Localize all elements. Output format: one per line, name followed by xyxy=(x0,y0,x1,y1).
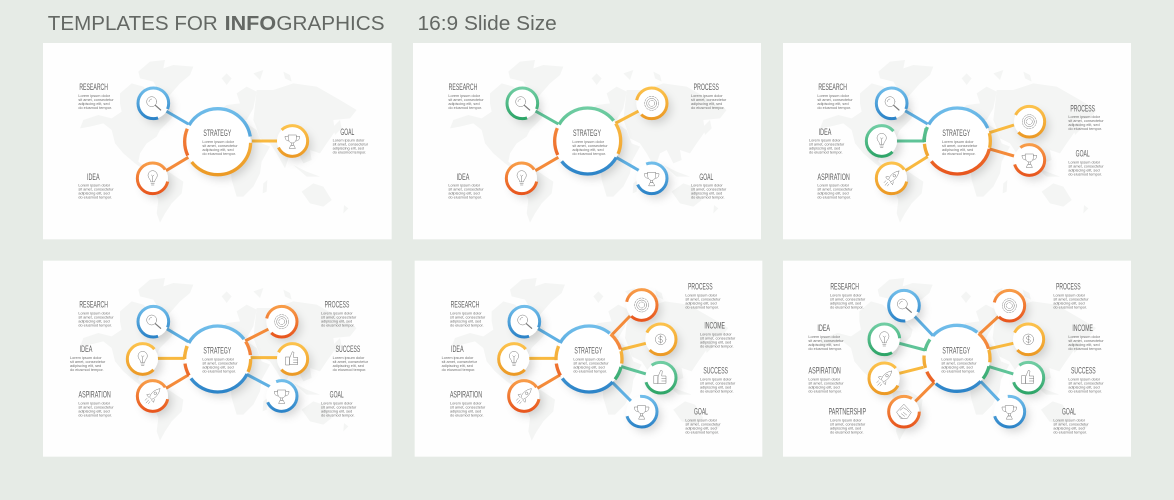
main circle: strategy xyxy=(556,326,622,392)
text: research: Lorem ipsum dolor xyxy=(78,94,111,98)
panel: seven nodes xyxy=(415,261,762,457)
text: idea: do eiusmod tempor. xyxy=(448,196,482,200)
text: aspiration: sit amet, consectetur xyxy=(808,382,844,386)
text: idea: sit amet, consectetur xyxy=(808,339,844,343)
text: idea: IDEA xyxy=(819,127,831,137)
text: income: adipiscing elit, sed xyxy=(700,341,731,345)
text: goal: sit amet, consectetur xyxy=(1068,164,1104,168)
text: process: adipiscing elit, sed xyxy=(685,302,717,306)
text: research: adipiscing elit, sed xyxy=(830,302,861,306)
text: research: Lorem ipsum dolor xyxy=(448,94,481,98)
text: research xyxy=(830,282,866,310)
text: strategy: sit amet, consectetur xyxy=(573,362,609,366)
text: goal: Lorem ipsum dolor xyxy=(691,184,723,188)
text: idea xyxy=(808,323,844,351)
text: process xyxy=(1068,103,1104,131)
text: idea: sit amet, consectetur xyxy=(448,188,484,192)
text: strategy: Lorem ipsum dolor xyxy=(202,140,235,144)
node: success xyxy=(250,344,308,374)
text: aspiration: sit amet, consectetur xyxy=(78,405,114,409)
text: aspiration: do eiusmod tempor. xyxy=(78,413,112,417)
text: research xyxy=(817,82,853,110)
text: process: sit amet, consectetur xyxy=(1068,119,1104,123)
text: strategy: STRATEGY xyxy=(203,128,231,138)
text: aspiration xyxy=(817,172,853,200)
text: success: do eiusmod tempor. xyxy=(333,368,366,372)
text: idea: IDEA xyxy=(87,172,100,182)
text: strategy: STRATEGY xyxy=(942,346,970,356)
text: strategy: do eiusmod tempor. xyxy=(202,152,236,156)
text: goal xyxy=(685,407,721,435)
text: process: Lorem ipsum dolor xyxy=(1068,115,1101,119)
text: income: INCOME xyxy=(704,321,725,331)
text: research: do eiusmod tempor. xyxy=(78,324,112,328)
node: process xyxy=(245,306,297,341)
node: goal xyxy=(252,126,308,156)
text: idea: adipiscing elit, sed xyxy=(809,147,840,151)
text: success: Lorem ipsum dolor xyxy=(1068,378,1101,382)
text: process: Lorem ipsum dolor xyxy=(321,312,353,316)
text: research: do eiusmod tempor. xyxy=(450,324,484,328)
text: strategy: sit amet, consectetur xyxy=(202,362,238,366)
panel: one goal, two inputs xyxy=(43,43,392,239)
text: research: RESEARCH xyxy=(449,82,477,92)
node: goal xyxy=(612,382,657,427)
text: goal xyxy=(1053,407,1089,435)
text: aspiration: do eiusmod tempor. xyxy=(817,196,851,200)
text: idea: do eiusmod tempor. xyxy=(809,151,843,155)
text: strategy: adipiscing elit, sed xyxy=(573,366,605,370)
node: process xyxy=(614,88,667,124)
text: income: Lorem ipsum dolor xyxy=(700,333,732,337)
text: strategy: do eiusmod tempor. xyxy=(572,152,606,156)
text: research: adipiscing elit, sed xyxy=(448,102,480,106)
text: aspiration: Lorem ipsum dolor xyxy=(808,378,841,382)
text: aspiration: adipiscing elit, sed xyxy=(78,409,110,413)
node: idea xyxy=(127,344,187,374)
text: research: RESEARCH xyxy=(79,82,108,92)
text: process: PROCESS xyxy=(1070,103,1095,113)
text: goal: do eiusmod tempor. xyxy=(691,196,725,200)
text: research: RESEARCH xyxy=(818,82,847,92)
node: aspiration xyxy=(509,375,560,411)
node: goal xyxy=(980,381,1025,427)
text: research: sit amet, consectetur xyxy=(78,316,114,320)
text: goal: Lorem ipsum dolor xyxy=(321,401,353,405)
node: aspiration xyxy=(869,363,923,394)
title: TEMPLATES FOR xyxy=(48,13,218,35)
text: process xyxy=(691,82,727,110)
text: process: PROCESS xyxy=(688,282,713,292)
text: goal: adipiscing elit, sed xyxy=(1068,168,1100,172)
text: strategy: adipiscing elit, sed xyxy=(202,366,234,370)
text: aspiration: ASPIRATION xyxy=(78,389,111,399)
text: aspiration: ASPIRATION xyxy=(450,389,482,399)
text: aspiration: adipiscing elit, sed xyxy=(808,386,840,390)
text: strategy: adipiscing elit, sed xyxy=(202,148,234,152)
node: success xyxy=(987,362,1044,393)
text: partnership: Lorem ipsum dolor xyxy=(830,419,862,423)
text: research: do eiusmod tempor. xyxy=(78,106,112,110)
node: aspiration xyxy=(137,375,188,411)
text: research: sit amet, consectetur xyxy=(450,316,486,320)
text: aspiration: sit amet, consectetur xyxy=(450,405,486,409)
text: strategy xyxy=(573,346,609,374)
text: partnership: PARTNERSHIP xyxy=(829,407,866,417)
text: idea xyxy=(70,344,106,372)
text: strategy: sit amet, consectetur xyxy=(202,144,238,148)
text: success: sit amet, consectetur xyxy=(700,382,736,386)
text: goal: adipiscing elit, sed xyxy=(685,427,717,431)
node: goal xyxy=(615,157,667,194)
node: research xyxy=(889,290,933,336)
text: idea: IDEA xyxy=(457,172,469,182)
text: research: Lorem ipsum dolor xyxy=(817,94,850,98)
text: process xyxy=(1053,282,1089,310)
node: research xyxy=(507,88,558,124)
text: aspiration xyxy=(808,366,844,394)
text: process xyxy=(685,282,721,310)
title xyxy=(48,13,385,35)
text: idea: Lorem ipsum dolor xyxy=(809,139,841,143)
node: goal xyxy=(987,145,1045,175)
text: research: RESEARCH xyxy=(79,300,108,310)
text: success: adipiscing elit, sed xyxy=(1068,386,1100,390)
text: goal: do eiusmod tempor. xyxy=(685,431,719,435)
node: research xyxy=(509,306,560,342)
text: research: do eiusmod tempor. xyxy=(817,106,851,110)
text: research xyxy=(78,300,114,328)
text: success: SUCCESS xyxy=(703,366,728,376)
text: research xyxy=(78,82,114,110)
text: aspiration: ASPIRATION xyxy=(808,366,841,376)
text: success xyxy=(700,366,736,394)
text: goal: do eiusmod tempor. xyxy=(1053,431,1087,435)
text: idea: Lorem ipsum dolor xyxy=(442,356,474,360)
text: idea: do eiusmod tempor. xyxy=(808,347,842,351)
text: income: adipiscing elit, sed xyxy=(1068,343,1100,347)
main circle: strategy xyxy=(555,108,621,174)
text: idea: do eiusmod tempor. xyxy=(70,368,104,372)
text: process: PROCESS xyxy=(694,82,719,92)
text: idea: IDEA xyxy=(80,344,92,354)
text: research: RESEARCH xyxy=(830,282,859,292)
text: goal xyxy=(1068,148,1104,176)
text: process: do eiusmod tempor. xyxy=(321,324,355,328)
text: success: sit amet, consectetur xyxy=(333,360,369,364)
text: strategy: do eiusmod tempor. xyxy=(573,370,607,374)
panel: four nodes xyxy=(413,43,761,239)
text: partnership: sit amet, consectetur xyxy=(830,423,866,427)
subtitle: 16:9 Slide Size xyxy=(418,13,557,35)
text: strategy: sit amet, consectetur xyxy=(941,362,977,366)
node: partnership xyxy=(889,382,935,427)
text: idea: do eiusmod tempor. xyxy=(78,196,112,200)
text: research: do eiusmod tempor. xyxy=(448,106,482,110)
text: aspiration xyxy=(78,389,114,417)
text: process: adipiscing elit, sed xyxy=(321,320,352,324)
text: success: adipiscing elit, sed xyxy=(700,386,731,390)
text: idea: adipiscing elit, sed xyxy=(70,364,101,368)
text: income: sit amet, consectetur xyxy=(700,337,736,341)
text: process: adipiscing elit, sed xyxy=(1068,123,1100,127)
text: goal: Lorem ipsum dolor xyxy=(1068,160,1101,164)
main circle: strategy xyxy=(185,326,251,392)
text: goal: GOAL xyxy=(1062,407,1076,417)
node: idea xyxy=(137,157,188,194)
text: income: Lorem ipsum dolor xyxy=(1068,335,1101,339)
text: strategy: STRATEGY xyxy=(942,128,970,138)
text: goal xyxy=(333,127,369,155)
text: strategy: sit amet, consectetur xyxy=(572,144,608,148)
text: research: sit amet, consectetur xyxy=(78,98,114,102)
text: success: Lorem ipsum dolor xyxy=(333,356,365,360)
text: research: adipiscing elit, sed xyxy=(78,320,110,324)
text: idea: do eiusmod tempor. xyxy=(442,368,475,372)
node: research xyxy=(138,88,188,124)
text: process: do eiusmod tempor. xyxy=(1053,306,1087,310)
node: aspiration xyxy=(876,157,928,194)
text: strategy: do eiusmod tempor. xyxy=(942,152,976,156)
text: process: do eiusmod tempor. xyxy=(691,106,725,110)
text: income: do eiusmod tempor. xyxy=(700,345,734,349)
text: research: sit amet, consectetur xyxy=(830,298,866,302)
title: INFO xyxy=(225,13,276,35)
text: strategy: Lorem ipsum dolor xyxy=(573,358,606,362)
text: idea xyxy=(448,172,484,200)
text: research: sit amet, consectetur xyxy=(817,98,853,102)
text: strategy: Lorem ipsum dolor xyxy=(202,358,235,362)
text: goal: Lorem ipsum dolor xyxy=(685,419,718,423)
text: strategy: adipiscing elit, sed xyxy=(941,366,973,370)
text: goal: Lorem ipsum dolor xyxy=(333,139,365,143)
node: goal xyxy=(246,374,297,411)
text: process: Lorem ipsum dolor xyxy=(1053,294,1086,298)
text: research: adipiscing elit, sed xyxy=(78,102,110,106)
text: research xyxy=(448,82,484,110)
text: strategy: do eiusmod tempor. xyxy=(202,370,236,374)
text: goal: GOAL xyxy=(330,389,344,399)
text: success: adipiscing elit, sed xyxy=(333,364,364,368)
text: process: do eiusmod tempor. xyxy=(685,306,719,310)
text: goal: GOAL xyxy=(340,127,354,137)
text: aspiration: do eiusmod tempor. xyxy=(808,390,842,394)
text: idea xyxy=(442,344,478,372)
text: strategy: STRATEGY xyxy=(574,346,602,356)
text: process: PROCESS xyxy=(325,300,349,310)
text: aspiration: ASPIRATION xyxy=(817,172,850,182)
text: idea xyxy=(809,127,845,155)
text: research: Lorem ipsum dolor xyxy=(830,294,862,298)
text: income xyxy=(1068,323,1104,351)
text: idea: IDEA xyxy=(451,344,464,354)
node: idea xyxy=(506,157,558,194)
panel: six nodes xyxy=(43,261,392,457)
text: idea xyxy=(78,172,114,200)
text: partnership xyxy=(829,407,866,435)
text: strategy: Lorem ipsum dolor xyxy=(572,140,605,144)
text: income: do eiusmod tempor. xyxy=(1068,347,1102,351)
text: goal: do eiusmod tempor. xyxy=(333,151,366,155)
text: income: sit amet, consectetur xyxy=(1068,339,1104,343)
text: process: Lorem ipsum dolor xyxy=(691,94,723,98)
text: idea: adipiscing elit, sed xyxy=(78,192,110,196)
text: process: PROCESS xyxy=(1056,282,1081,292)
text: research: do eiusmod tempor. xyxy=(830,306,864,310)
text: process: Lorem ipsum dolor xyxy=(685,294,718,298)
text: idea: sit amet, consectetur xyxy=(78,188,114,192)
text: goal: adipiscing elit, sed xyxy=(691,192,722,196)
text: idea: Lorem ipsum dolor xyxy=(808,335,841,339)
text: strategy xyxy=(572,128,608,156)
node: idea xyxy=(866,126,926,156)
text: idea: adipiscing elit, sed xyxy=(442,364,473,368)
node: research xyxy=(138,306,188,342)
text: aspiration: do eiusmod tempor. xyxy=(450,413,484,417)
text: strategy: STRATEGY xyxy=(573,128,601,138)
text: aspiration xyxy=(450,389,486,417)
text: process: sit amet, consectetur xyxy=(691,98,727,102)
text: goal: Lorem ipsum dolor xyxy=(1053,419,1086,423)
text: process: adipiscing elit, sed xyxy=(691,102,722,106)
text: success: sit amet, consectetur xyxy=(1068,382,1104,386)
text: idea: sit amet, consectetur xyxy=(809,143,845,147)
node: process xyxy=(978,290,1025,335)
text: strategy xyxy=(202,346,238,374)
text: goal: sit amet, consectetur xyxy=(333,143,369,147)
text: strategy: STRATEGY xyxy=(203,346,231,356)
text: goal: sit amet, consectetur xyxy=(691,188,727,192)
title: GRAPHICS xyxy=(276,13,385,35)
text: aspiration: Lorem ipsum dolor xyxy=(450,401,482,405)
text: research: Lorem ipsum dolor xyxy=(450,312,482,316)
node: idea xyxy=(869,324,925,355)
text: strategy xyxy=(942,128,978,156)
text: success: SUCCESS xyxy=(1071,366,1096,376)
node: process xyxy=(612,290,657,335)
text: goal xyxy=(691,172,727,200)
text: strategy xyxy=(941,346,977,374)
text: strategy: adipiscing elit, sed xyxy=(572,148,604,152)
panel: five nodes xyxy=(783,43,1131,239)
node: process xyxy=(987,106,1045,137)
text: idea: IDEA xyxy=(817,323,830,333)
text: process: sit amet, consectetur xyxy=(1053,298,1089,302)
text: goal: do eiusmod tempor. xyxy=(1068,172,1102,176)
text: goal: GOAL xyxy=(699,172,713,182)
text: success: do eiusmod tempor. xyxy=(700,390,734,394)
node: idea xyxy=(499,344,558,374)
text: research: Lorem ipsum dolor xyxy=(78,312,111,316)
text: success xyxy=(1068,366,1104,394)
text: strategy: Lorem ipsum dolor xyxy=(941,358,974,362)
text: process: do eiusmod tempor. xyxy=(1068,127,1102,131)
text: goal: adipiscing elit, sed xyxy=(333,147,364,151)
panel: eight nodes xyxy=(783,261,1131,457)
text: success: Lorem ipsum dolor xyxy=(700,378,732,382)
text: strategy: adipiscing elit, sed xyxy=(942,148,973,152)
text: research: adipiscing elit, sed xyxy=(450,320,481,324)
text: success: SUCCESS xyxy=(336,344,360,354)
text: idea: sit amet, consectetur xyxy=(70,360,106,364)
text: aspiration: adipiscing elit, sed xyxy=(450,409,481,413)
text: research: sit amet, consectetur xyxy=(448,98,484,102)
node: income xyxy=(619,324,676,355)
text: goal: GOAL xyxy=(1076,148,1090,158)
main circle: strategy xyxy=(924,108,990,174)
text: aspiration: Lorem ipsum dolor xyxy=(78,401,111,405)
text: idea: adipiscing elit, sed xyxy=(448,192,480,196)
text: strategy xyxy=(202,128,238,156)
text: process: adipiscing elit, sed xyxy=(1053,302,1085,306)
text: strategy: Lorem ipsum dolor xyxy=(942,140,974,144)
text: idea: Lorem ipsum dolor xyxy=(70,356,102,360)
text: aspiration: adipiscing elit, sed xyxy=(817,192,849,196)
text: goal: adipiscing elit, sed xyxy=(321,409,352,413)
text: goal: sit amet, consectetur xyxy=(321,405,357,409)
text: research: adipiscing elit, sed xyxy=(817,102,849,106)
text: goal xyxy=(321,389,357,417)
text: research: RESEARCH xyxy=(451,300,479,310)
text: goal: sit amet, consectetur xyxy=(1053,423,1089,427)
text: process: sit amet, consectetur xyxy=(321,316,357,320)
text: income: INCOME xyxy=(1072,323,1093,333)
main circle: strategy xyxy=(924,325,990,391)
node: success xyxy=(619,362,676,393)
text: partnership: do eiusmod tempor. xyxy=(830,431,864,435)
text: partnership: adipiscing elit, sed xyxy=(830,427,861,431)
text: research xyxy=(450,300,486,328)
text: aspiration: sit amet, consectetur xyxy=(817,188,853,192)
text: goal: adipiscing elit, sed xyxy=(1053,427,1085,431)
text: success: do eiusmod tempor. xyxy=(1068,390,1102,394)
node: research xyxy=(876,88,928,124)
node: income xyxy=(987,324,1044,355)
text: strategy: do eiusmod tempor. xyxy=(941,370,975,374)
text: goal: sit amet, consectetur xyxy=(685,423,721,427)
text: success xyxy=(333,344,369,372)
text: process xyxy=(321,300,357,328)
text: idea: adipiscing elit, sed xyxy=(808,343,840,347)
text: idea: Lorem ipsum dolor xyxy=(448,184,481,188)
text: goal: do eiusmod tempor. xyxy=(321,413,355,417)
text: income xyxy=(700,321,736,349)
text: goal: GOAL xyxy=(694,407,708,417)
text: aspiration: Lorem ipsum dolor xyxy=(817,184,850,188)
text: process: sit amet, consectetur xyxy=(685,298,721,302)
text: idea: Lorem ipsum dolor xyxy=(78,184,111,188)
text: idea: sit amet, consectetur xyxy=(442,360,478,364)
main circle: strategy xyxy=(185,109,251,175)
text: strategy: sit amet, consectetur xyxy=(942,144,978,148)
